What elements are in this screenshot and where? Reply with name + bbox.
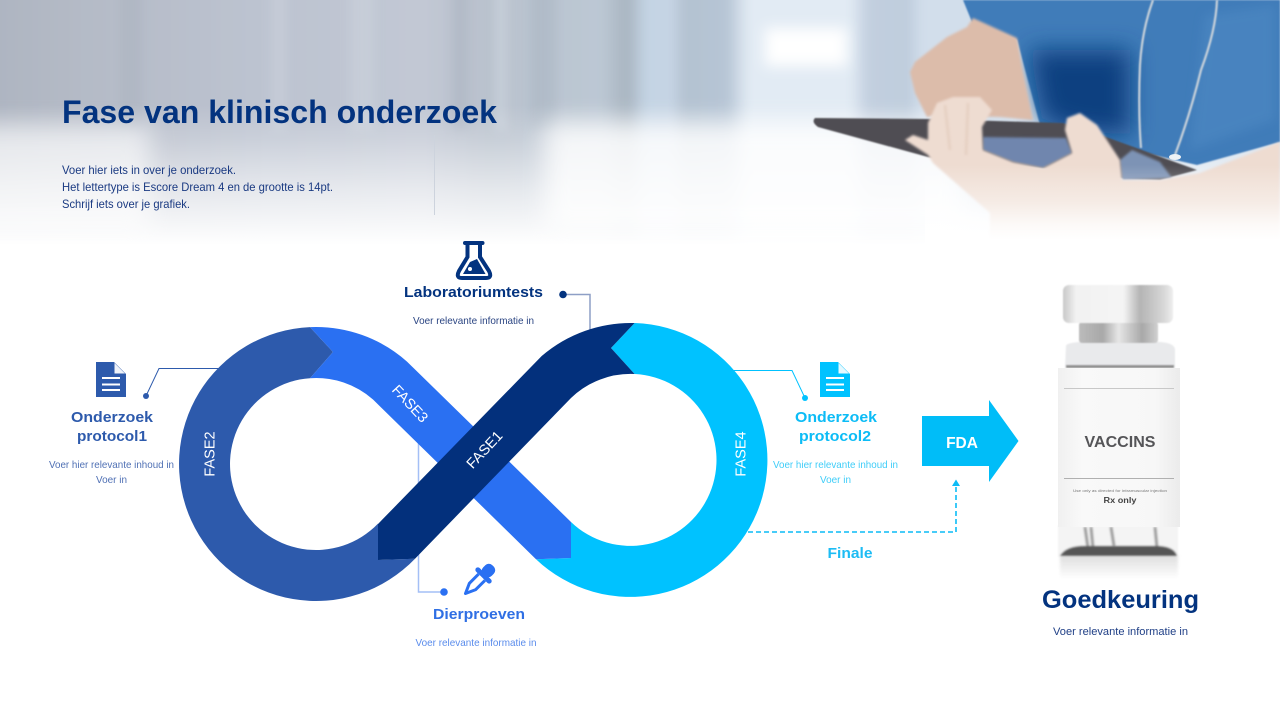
- segment: FASE3: [310, 327, 571, 559]
- heading: Onderzoek protocol2: [795, 409, 878, 445]
- heading: Onderzoek protocol2: protocol2: [799, 428, 871, 445]
- connector: onderzoek protocol 2: [730, 370, 808, 401]
- heading: Goedkeuring: Goedkeuring: [1042, 586, 1199, 614]
- intro text block: Het lettertype is Escore Dream 4 en de grootte is 14pt.: [62, 180, 333, 194]
- heading: Laboratoriumtests: Laboratoriumtests: [404, 284, 543, 301]
- block: onderzoek protocol 1: [49, 362, 174, 486]
- upper hand: [910, 18, 1033, 120]
- text: protocol 2 info: [773, 459, 898, 486]
- segment: FASE2: [179, 327, 415, 601]
- text: protocol 1 info: Voer in: [96, 474, 127, 486]
- doctor scrubs: [963, 0, 1280, 165]
- label: FASE4: FASE4: [734, 431, 750, 477]
- icon: document: [820, 362, 850, 397]
- header photo: hospital corridor with doctor holding tablet: [0, 0, 1280, 250]
- intro text block: [62, 163, 333, 211]
- infinity loop chart: [179, 323, 767, 601]
- heading: Onderzoek protocol1: protocol1: [77, 428, 147, 445]
- text: laboratoriumtests info: Voer relevante informatie in: [413, 315, 534, 327]
- text: goedkeuring info: Voer relevante informatie in: [1053, 626, 1188, 638]
- heading: Onderzoek protocol1: [71, 409, 154, 445]
- tablet: [814, 118, 1197, 180]
- title: Fase van klinisch onderzoek: [62, 94, 497, 130]
- vial reflection: [1060, 555, 1178, 579]
- connector: onderzoek protocol 1: [143, 368, 222, 399]
- segment: FASE4: [536, 323, 767, 597]
- label: FASE1: FASE1: [464, 428, 506, 472]
- icon: flask: [458, 241, 490, 278]
- block: dierproeven: [416, 559, 537, 649]
- label: FASE3: FASE3: [388, 382, 431, 426]
- segment: FASE1: [378, 323, 635, 560]
- vial label: Use only as directed for intramuscular injection: [1073, 489, 1167, 493]
- connector: dierproeven: [418, 440, 448, 596]
- heading: Onderzoek protocol1: Onderzoek: [71, 409, 154, 426]
- lower hand and arm: [904, 96, 1280, 222]
- block: laboratoriumtests: [404, 241, 543, 327]
- arrow: FDA: FDA: [946, 435, 978, 452]
- vial glass base: [1058, 525, 1178, 557]
- heading: Onderzoek protocol2: Onderzoek: [795, 409, 878, 426]
- label: FASE2: FASE2: [202, 431, 218, 477]
- vial label: [1058, 368, 1180, 527]
- text: protocol 2 info: Voer hier relevante inhoud in: [773, 459, 898, 471]
- vial label: VACCINS: [1084, 434, 1156, 451]
- vial neck: [1079, 322, 1158, 343]
- connector: laboratoriumtests: [559, 291, 590, 330]
- text: protocol 1 info: Voer hier relevante inhoud in: [49, 459, 174, 471]
- icon: document: [96, 362, 126, 397]
- dashed arrow: finale route: [748, 480, 960, 532]
- block: onderzoek protocol 2: [773, 362, 898, 486]
- intro text block: Schrijf iets over je grafiek.: [62, 197, 190, 211]
- vial label: Rx only: [1104, 496, 1137, 505]
- text: protocol 2 info: Voer in: [820, 474, 851, 486]
- intro text block: Voer hier iets in over je onderzoek.: [62, 163, 236, 177]
- icon: dropper: [458, 559, 500, 601]
- text: protocol 1 info: [49, 459, 174, 486]
- vial shoulder: [1065, 342, 1175, 368]
- arrow: FDA: [922, 400, 1018, 482]
- block: goedkeuring: [1042, 586, 1199, 638]
- text: dierproeven info: Voer relevante informatie in: [416, 637, 537, 649]
- label: Finale: Finale: [828, 546, 872, 562]
- vaccine vial: [1058, 285, 1178, 579]
- heading: Dierproeven: Dierproeven: [433, 606, 525, 623]
- corridor bright window: [765, 28, 847, 66]
- vial cap: [1063, 285, 1173, 323]
